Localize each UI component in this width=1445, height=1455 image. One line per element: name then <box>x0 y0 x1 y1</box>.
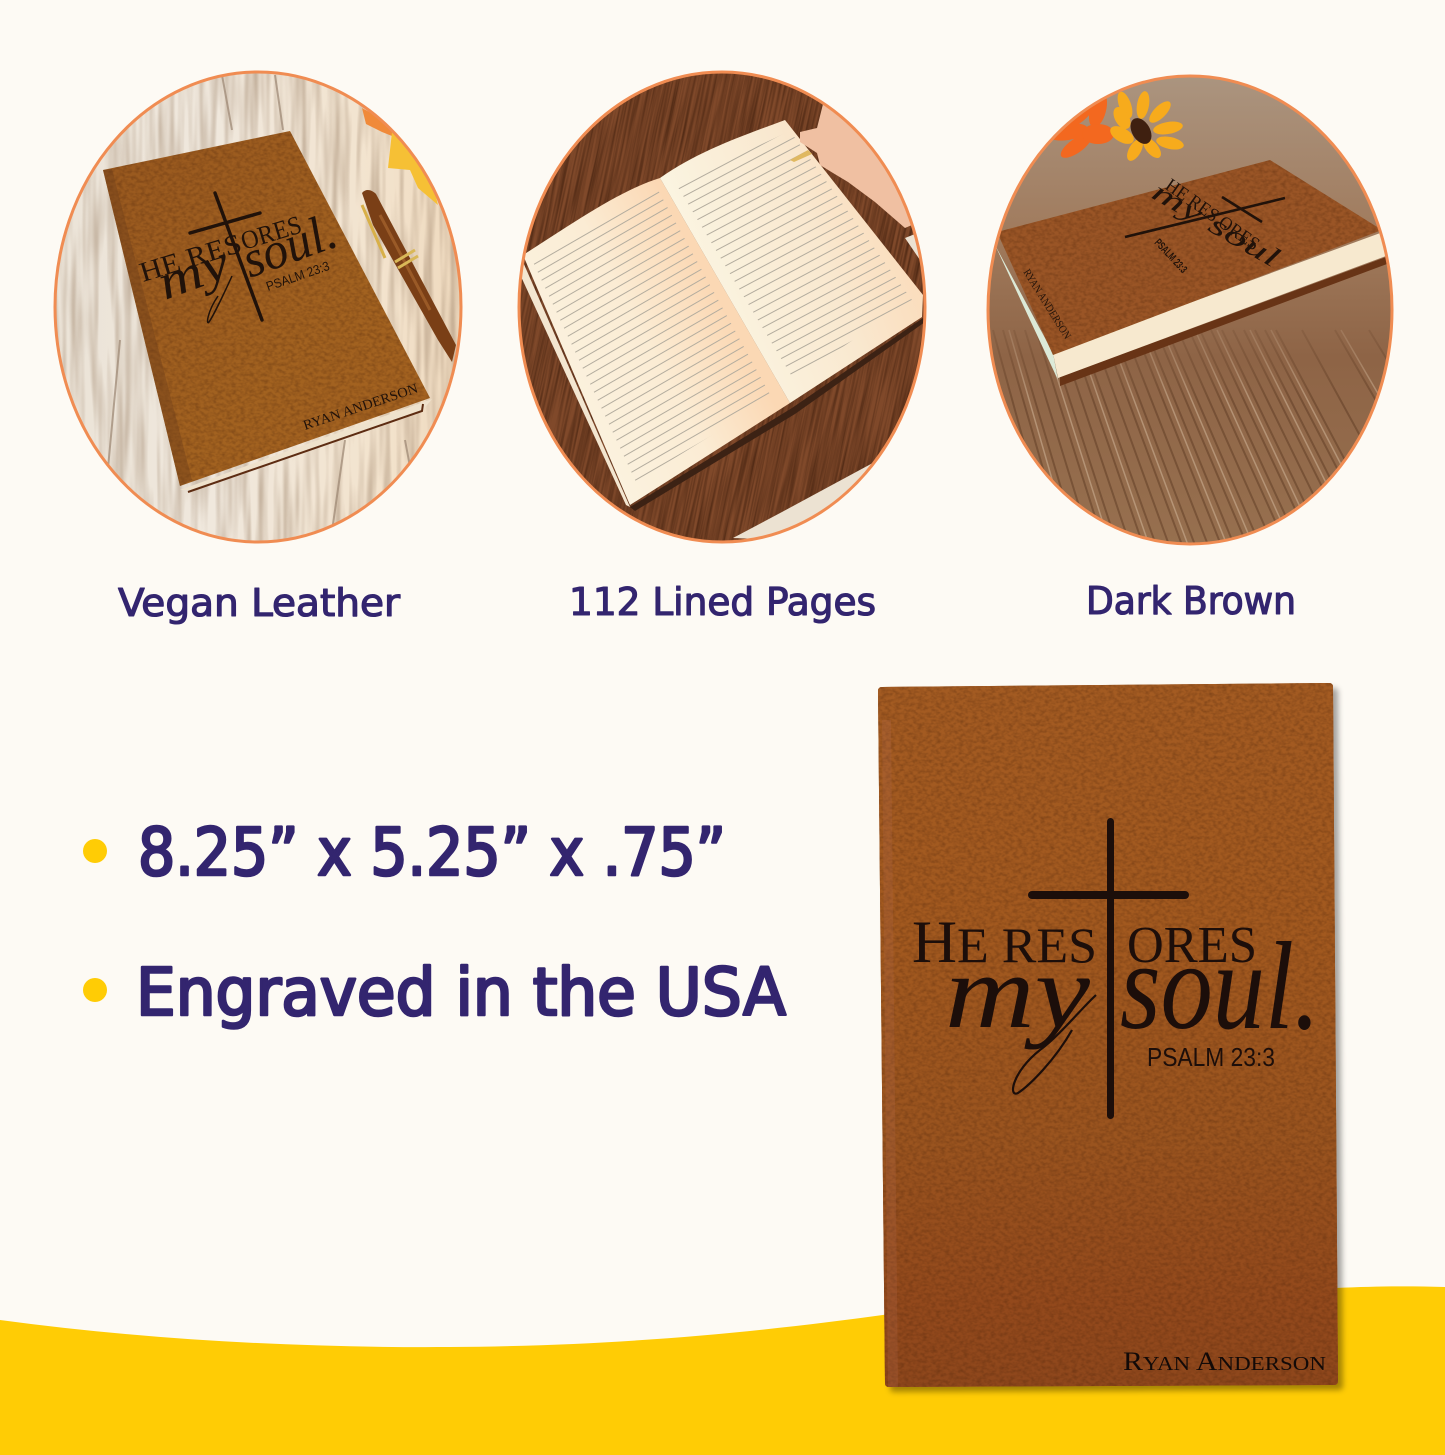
caption: vegan leather: Vegan Leather <box>118 581 401 625</box>
wood fan grain <box>992 330 1386 542</box>
flowers <box>362 108 392 136</box>
ruled lines <box>534 192 770 480</box>
verse: PSALM 23:3 <box>1147 1042 1275 1072</box>
pen tip <box>790 150 812 162</box>
engraved script: soul: soul. <box>1120 918 1320 1056</box>
photo: dark brown journal on wood table: my soul <box>1146 176 1285 274</box>
book cover <box>997 160 1382 355</box>
spine edge shade <box>882 720 898 1387</box>
sunflower <box>1107 90 1185 163</box>
rug <box>733 464 872 538</box>
engraved text: HE RES ORES <box>1161 175 1263 255</box>
name: RYAN ANDERSON <box>302 381 420 434</box>
bullet: engraved in the USA: Engraved in the USA <box>136 954 786 1031</box>
engraved cross <box>1125 197 1285 237</box>
engraved cross <box>190 193 262 320</box>
cross <box>1028 818 1189 1119</box>
photo: dark brown journal on wood table: PSALM 23:3 <box>1152 237 1189 276</box>
caption: lined pages: 112 Lined Pages <box>569 580 876 624</box>
personalised name: RYAN ANDERSON <box>1123 1347 1326 1376</box>
engraved title: HE RES <box>912 909 1097 975</box>
photo: dark brown journal on wood table <box>986 74 1394 546</box>
left page <box>523 178 790 505</box>
book cover <box>103 131 430 486</box>
photo: vegan leather journal on white wood: soul. <box>235 203 344 289</box>
script flourish: y tail <box>1013 995 1096 1094</box>
yellow wave footer <box>0 1286 1445 1455</box>
photo: open lined pages <box>518 70 926 544</box>
hand <box>800 104 912 228</box>
book shadow <box>630 318 925 511</box>
journal front cover: ORES <box>1127 917 1257 974</box>
photo: vegan leather journal on white wood: ORES <box>237 210 305 256</box>
engraved script: my: my <box>945 933 1090 1050</box>
bullet: dimensions: 8.25” x 5.25” x .75” <box>138 814 726 891</box>
right page <box>660 120 923 403</box>
orange flower <box>1054 98 1114 158</box>
journal front cover <box>878 683 1338 1387</box>
photo: vegan leather journal on white wood <box>50 70 465 545</box>
side pages <box>995 245 1058 380</box>
engraved script: my soul: my <box>150 233 237 310</box>
caption: colour: Dark Brown <box>1086 579 1296 623</box>
pen <box>362 190 456 362</box>
engraved text: he restores: HE RES <box>136 228 245 289</box>
book lower cover <box>1060 257 1387 386</box>
front pages <box>1053 232 1386 378</box>
page strip <box>518 262 630 507</box>
page block <box>180 399 432 490</box>
photo: dark brown journal on wood table: RYAN ANDERSON <box>1020 267 1073 341</box>
verse: PSALM 23:3 <box>264 258 331 294</box>
